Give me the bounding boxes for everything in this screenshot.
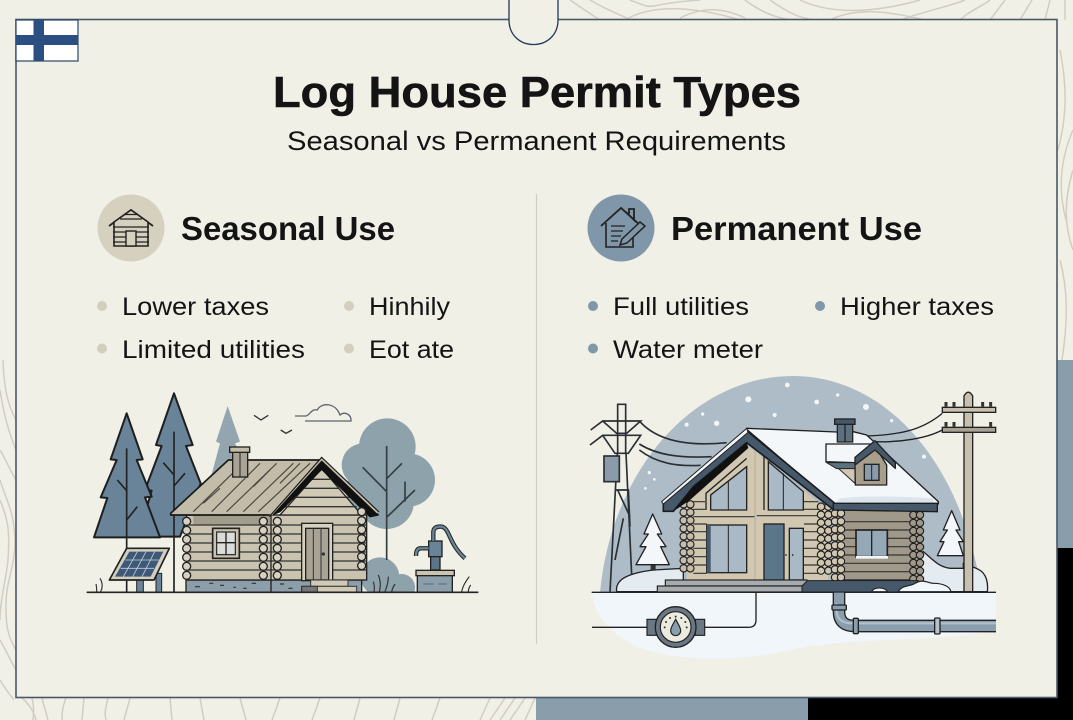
title: Log House Permit Types [273,68,801,117]
transmission tower [590,404,727,592]
chimney [230,447,250,477]
list: permanent items: Water meter [613,336,763,364]
birds [254,415,292,433]
icon: house permit badge [588,194,654,262]
cabin door [302,523,333,581]
list: permanent items: Higher taxes [840,293,994,321]
panel: seasonal use [87,194,478,601]
bottom black block [808,698,1073,720]
water pump [416,527,465,592]
corner logs [680,501,687,572]
list: seasonal items: Lower taxes [122,293,269,321]
snow roof [747,428,938,504]
illustration: seasonal cabin [87,393,478,601]
faded tree [208,406,257,487]
main fascia [663,431,834,511]
grass [96,575,471,592]
right snowy tree [937,511,963,556]
cloud [295,405,351,421]
utility pole [865,392,996,592]
heading: seasonal use: Seasonal Use [181,210,395,247]
icon: cabin badge [98,194,164,262]
dormer [826,441,895,485]
front gable wall [687,445,828,580]
round tree [342,418,435,601]
cabin window [213,528,239,558]
water meter [592,593,756,647]
chimney [835,419,855,442]
list: seasonal items [97,293,454,364]
heading: permanent use: Permanent Use [671,210,922,247]
icon: Finnish flag [16,20,78,61]
bottom blue block [536,698,809,720]
right edge blue block [1057,360,1073,549]
list: permanent items: Full utilities [613,293,749,321]
center divider [536,194,538,644]
winter sky dome [600,376,982,592]
solar panel [109,548,169,592]
snowy ground [592,593,996,659]
top tab [509,0,558,44]
illustration: permanent house [590,376,996,659]
cabin [171,447,379,592]
list: permanent items [588,293,994,364]
list: seasonal items: Hinhily [369,293,451,321]
right edge black block [1057,548,1073,720]
snow drifts [617,552,988,592]
left snowy tree [636,514,669,571]
list: seasonal items: Limited utilities [122,336,305,364]
right window [856,530,888,559]
ground line [87,590,478,595]
log house [657,419,951,592]
pine tree left [94,413,160,592]
panel: permanent use [588,194,996,659]
ground line [592,590,996,594]
cabin steps [302,580,357,592]
list: seasonal items: Eot ate [369,336,454,364]
water pipe [832,593,996,634]
right wing [837,510,920,580]
pine tree right [138,393,201,592]
subtitle: Seasonal vs Permanent Requirements [287,126,786,156]
foundation and steps [665,580,807,586]
glazing [706,456,803,580]
snowflakes [644,383,926,490]
